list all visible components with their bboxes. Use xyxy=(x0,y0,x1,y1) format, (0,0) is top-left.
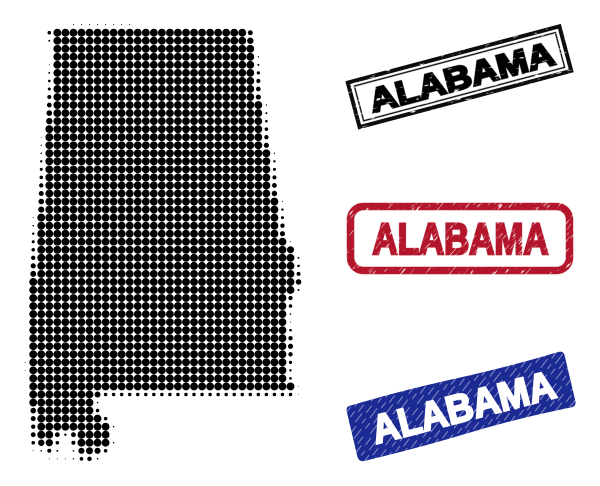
stamp text: black: ALABAMA xyxy=(365,35,558,119)
stamp: black rectangular ALABAMA xyxy=(348,26,571,127)
stamp text: white: ALABAMA xyxy=(367,363,560,453)
stamp plate: blue xyxy=(344,350,578,463)
stamp text: red: ALABAMA xyxy=(372,215,548,264)
stamp: red rounded ALABAMA xyxy=(319,99,600,378)
halftone dot map of Alabama xyxy=(25,25,301,461)
stamp frame: black double border xyxy=(348,26,571,127)
stamp frame: red rounded border xyxy=(350,206,570,270)
stamp: blue filled ALABAMA xyxy=(344,350,578,463)
